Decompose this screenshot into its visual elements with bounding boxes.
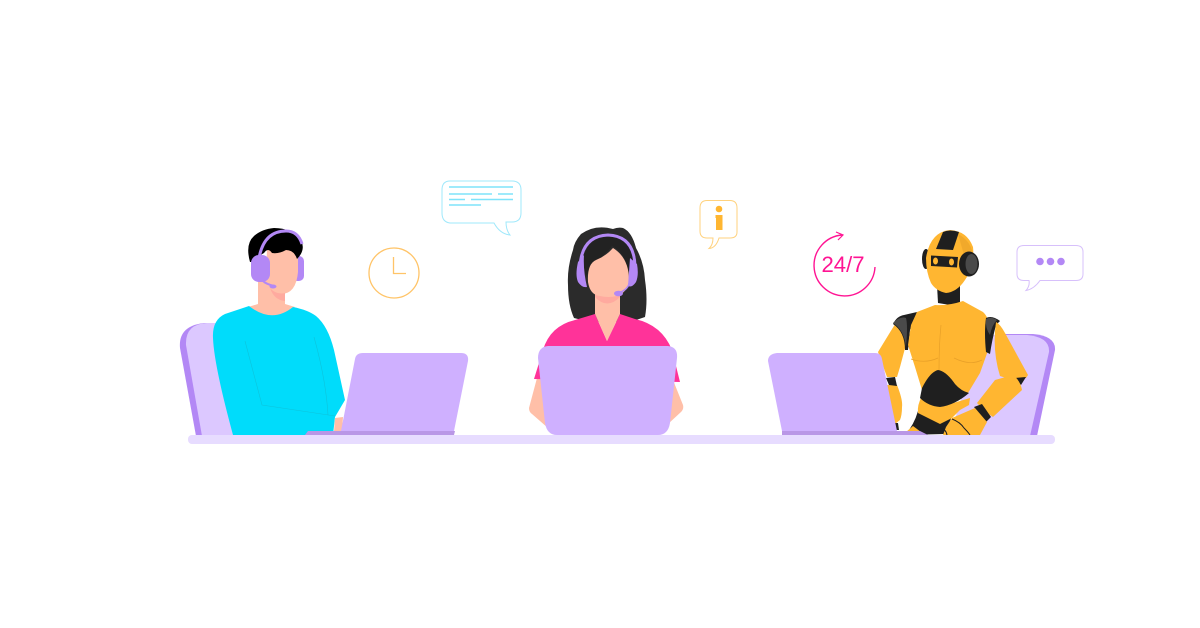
neck <box>937 285 960 305</box>
chest lines <box>911 325 982 370</box>
character: woman with headset <box>529 227 683 428</box>
far elbow <box>886 377 897 386</box>
head speaker <box>959 252 979 276</box>
head stripe <box>936 230 959 250</box>
head <box>926 230 973 293</box>
laptop: left <box>305 353 468 435</box>
front hair <box>582 234 634 276</box>
24/7 text: 24/7 <box>822 252 864 277</box>
ear cups <box>576 255 638 287</box>
far forearm <box>887 385 902 424</box>
chair: right <box>950 334 1055 436</box>
near elbow <box>1015 377 1026 385</box>
desk <box>188 435 1055 444</box>
microphone <box>263 281 274 286</box>
eyes <box>933 258 938 264</box>
torso <box>908 301 990 393</box>
neck <box>248 270 295 322</box>
far arm upper <box>878 321 908 377</box>
hair <box>248 228 303 262</box>
icon: 24/7 cycle <box>814 232 875 296</box>
near forearm <box>977 375 1022 417</box>
neck shadow <box>595 292 620 304</box>
sleeve seams <box>245 337 335 416</box>
character: man with headset <box>213 228 345 435</box>
visor <box>931 256 958 268</box>
hair <box>568 227 646 322</box>
left ear cup <box>251 255 270 282</box>
head shade <box>958 234 973 262</box>
bare arms <box>529 378 683 428</box>
icon: ellipsis bubble <box>1017 246 1083 290</box>
lower waist <box>905 411 952 435</box>
far shoulder joint <box>893 312 917 350</box>
face <box>588 248 629 297</box>
neck <box>595 280 620 341</box>
icon: clock <box>369 248 419 298</box>
headband <box>259 231 302 258</box>
wrist <box>974 404 991 422</box>
finger lines <box>940 419 970 435</box>
neck shadow <box>270 288 285 301</box>
icon: chat bubble with text lines <box>442 181 521 235</box>
near hand <box>943 408 987 435</box>
hand <box>334 417 343 432</box>
abdomen <box>920 370 969 407</box>
near arm upper <box>995 322 1028 380</box>
shirt <box>213 306 345 435</box>
laptop: centre <box>538 346 677 435</box>
headband <box>580 235 635 266</box>
far ear <box>922 249 930 269</box>
near shoulder joint <box>985 317 1000 354</box>
right ear cup <box>292 256 304 281</box>
icon: info bubble <box>700 200 737 248</box>
top <box>534 314 680 382</box>
hips <box>918 396 970 424</box>
face <box>266 248 298 294</box>
microphone <box>618 280 630 293</box>
small far hand <box>906 426 921 432</box>
chair: left <box>180 323 240 436</box>
laptop: right <box>768 353 928 435</box>
character: robot <box>878 230 1028 435</box>
